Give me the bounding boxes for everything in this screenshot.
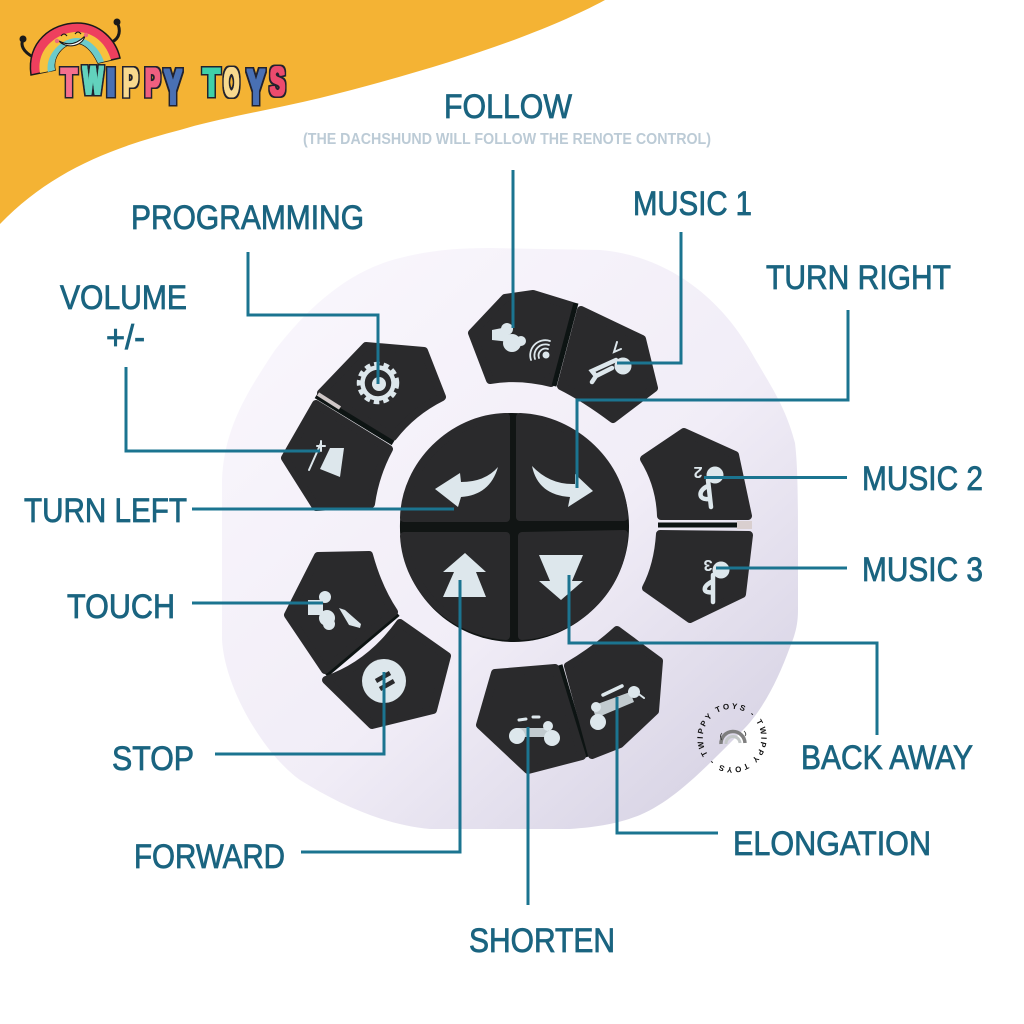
- logo: Twippy Toys: [20, 18, 285, 115]
- logo wordmark: Y: [164, 59, 182, 115]
- button group: center direction pad: [400, 413, 629, 642]
- label: stop: STOP: [112, 740, 194, 778]
- leader line: turn left: [192, 508, 454, 510]
- logo wordmark: I: [106, 61, 116, 105]
- button: volume: [285, 404, 389, 507]
- leader line: touch: [192, 602, 323, 604]
- button: turn right: [520, 417, 624, 517]
- logo wordmark: [61, 59, 285, 115]
- icon: short dog: [509, 717, 560, 746]
- pad gap backing: [400, 413, 629, 642]
- icon: left arrow: [435, 467, 498, 507]
- label: volume plus minus: +/-: [106, 319, 145, 357]
- leader line: shorten: [526, 727, 530, 905]
- leader line: music 2: [704, 476, 847, 479]
- button: music 2: [644, 432, 748, 516]
- logo wordmark: P: [123, 61, 138, 105]
- icon: touch dog: [308, 591, 361, 630]
- logo wordmark: T: [203, 61, 220, 105]
- icon: right arrow: [532, 466, 593, 507]
- icon: gear: [359, 364, 397, 402]
- label: music 3: MUSIC 3: [862, 551, 983, 589]
- leader line: music 1: [617, 232, 681, 363]
- button: stop: [326, 623, 447, 725]
- leader line: music 3: [716, 566, 847, 570]
- label: shorten: SHORTEN: [469, 922, 615, 960]
- leader line: follow: [512, 170, 514, 328]
- button: turn left: [404, 417, 506, 518]
- logo wordmark: Y: [247, 59, 265, 115]
- label: forward: FORWARD: [134, 838, 285, 876]
- leader line: forward: [301, 580, 460, 852]
- icon: volume bell: [309, 441, 344, 477]
- icon: stop circle: [362, 659, 406, 703]
- label: music 1: MUSIC 1: [633, 185, 752, 223]
- orange corner banner: [0, 0, 605, 224]
- button: programming: [321, 346, 442, 437]
- icon: music note 2: 2: [693, 463, 702, 480]
- label: elongation: ELONGATION: [733, 825, 931, 863]
- leader line: turn right: [577, 310, 848, 488]
- icon: double down arrow: [539, 555, 583, 600]
- leader line: back away: [569, 575, 877, 735]
- button: music 1: [561, 310, 654, 419]
- label: back away: BACK AWAY: [801, 739, 973, 777]
- label: touch: TOUCH: [67, 588, 175, 626]
- logo wordmark: P: [145, 61, 160, 105]
- icon: music note 3: 3: [703, 556, 712, 573]
- button gaps between paired keys: [316, 303, 752, 757]
- icon: long dog: [590, 686, 644, 730]
- label: volume: VOLUME: [60, 279, 187, 317]
- remote control body: [222, 248, 798, 829]
- icon: double up arrow: [443, 553, 486, 597]
- icon: dog with signal: [492, 323, 550, 360]
- leader line: stop: [215, 672, 384, 754]
- label: follow: FOLLOW: [444, 88, 572, 126]
- logo wordmark: T: [61, 61, 77, 105]
- button: forward: [404, 536, 506, 636]
- button: shorten: [480, 668, 582, 770]
- label: programming: PROGRAMMING: [131, 199, 364, 237]
- button: elongation: [568, 630, 659, 755]
- label: follow note: (THE DACHSHUND WILL FOLLOW THE RENOTE CONTROL): [303, 131, 711, 148]
- leader line: volume: [126, 367, 320, 451]
- button: back away: [522, 534, 624, 636]
- button: music 3: [646, 534, 749, 619]
- leader line: programming: [248, 252, 378, 384]
- icon: music note 1: [592, 342, 632, 382]
- watermark: circular Twippy Toys stamp: TWIPPY TOYS - TWIPPY TOYS -: [697, 703, 767, 773]
- button: touch: [288, 555, 394, 670]
- logo wordmark: O: [224, 61, 239, 105]
- label: music 2: MUSIC 2: [862, 460, 983, 498]
- logo wordmark: S: [270, 60, 285, 104]
- label: turn left: TURN LEFT: [24, 492, 187, 530]
- logo wordmark: W: [83, 59, 103, 103]
- icon: rainbow mascot: [20, 18, 120, 75]
- leader line: elongation: [617, 697, 718, 833]
- label: turn right: TURN RIGHT: [766, 259, 951, 297]
- button: follow: [472, 294, 572, 383]
